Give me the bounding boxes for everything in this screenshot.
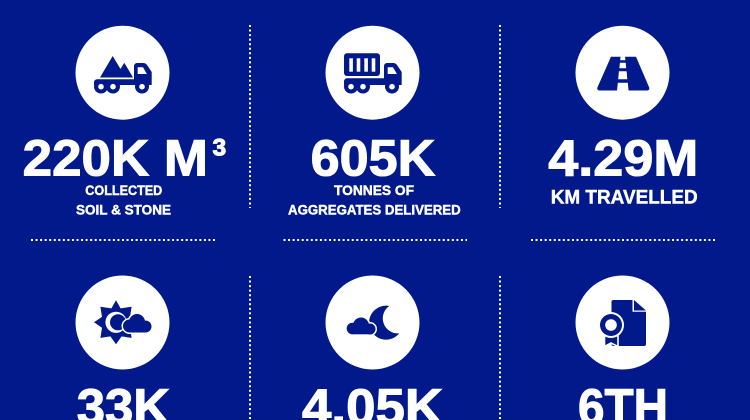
icon: sun and cloud (76, 276, 170, 370)
icon: dump truck with soil (76, 26, 170, 120)
number: 220K m3: 3 (213, 135, 226, 162)
number: 4.29M: 4.29M (548, 130, 698, 187)
panel: 4.05K night (302, 276, 443, 420)
panel: km travelled (548, 26, 698, 208)
icon: container truck (326, 26, 420, 120)
caption: tonnes of aggregates delivered: TONNES OF (334, 183, 414, 198)
caption: tonnes of aggregates delivered: AGGREGATES DELIVERED (288, 202, 461, 217)
number: 220K m3: 220K M (23, 130, 208, 187)
caption: collected soil and stone: SOIL & STONE (76, 202, 171, 217)
caption: collected soil and stone: COLLECTED (85, 183, 162, 198)
panel: 33K day (76, 276, 170, 420)
panel: collected soil and stone (23, 26, 226, 217)
caption: collected soil and stone (76, 183, 171, 217)
number: 605K: 605K (311, 130, 435, 187)
panel: 6th (576, 276, 670, 420)
icon: moon and cloud (326, 276, 420, 370)
caption: km travelled: KM TRAVELLED (551, 187, 698, 208)
caption: tonnes of aggregates delivered (288, 183, 461, 217)
icon: road (576, 26, 670, 120)
icon: document with award ribbon (576, 276, 670, 370)
panel: tonnes of aggregates delivered (288, 26, 461, 217)
